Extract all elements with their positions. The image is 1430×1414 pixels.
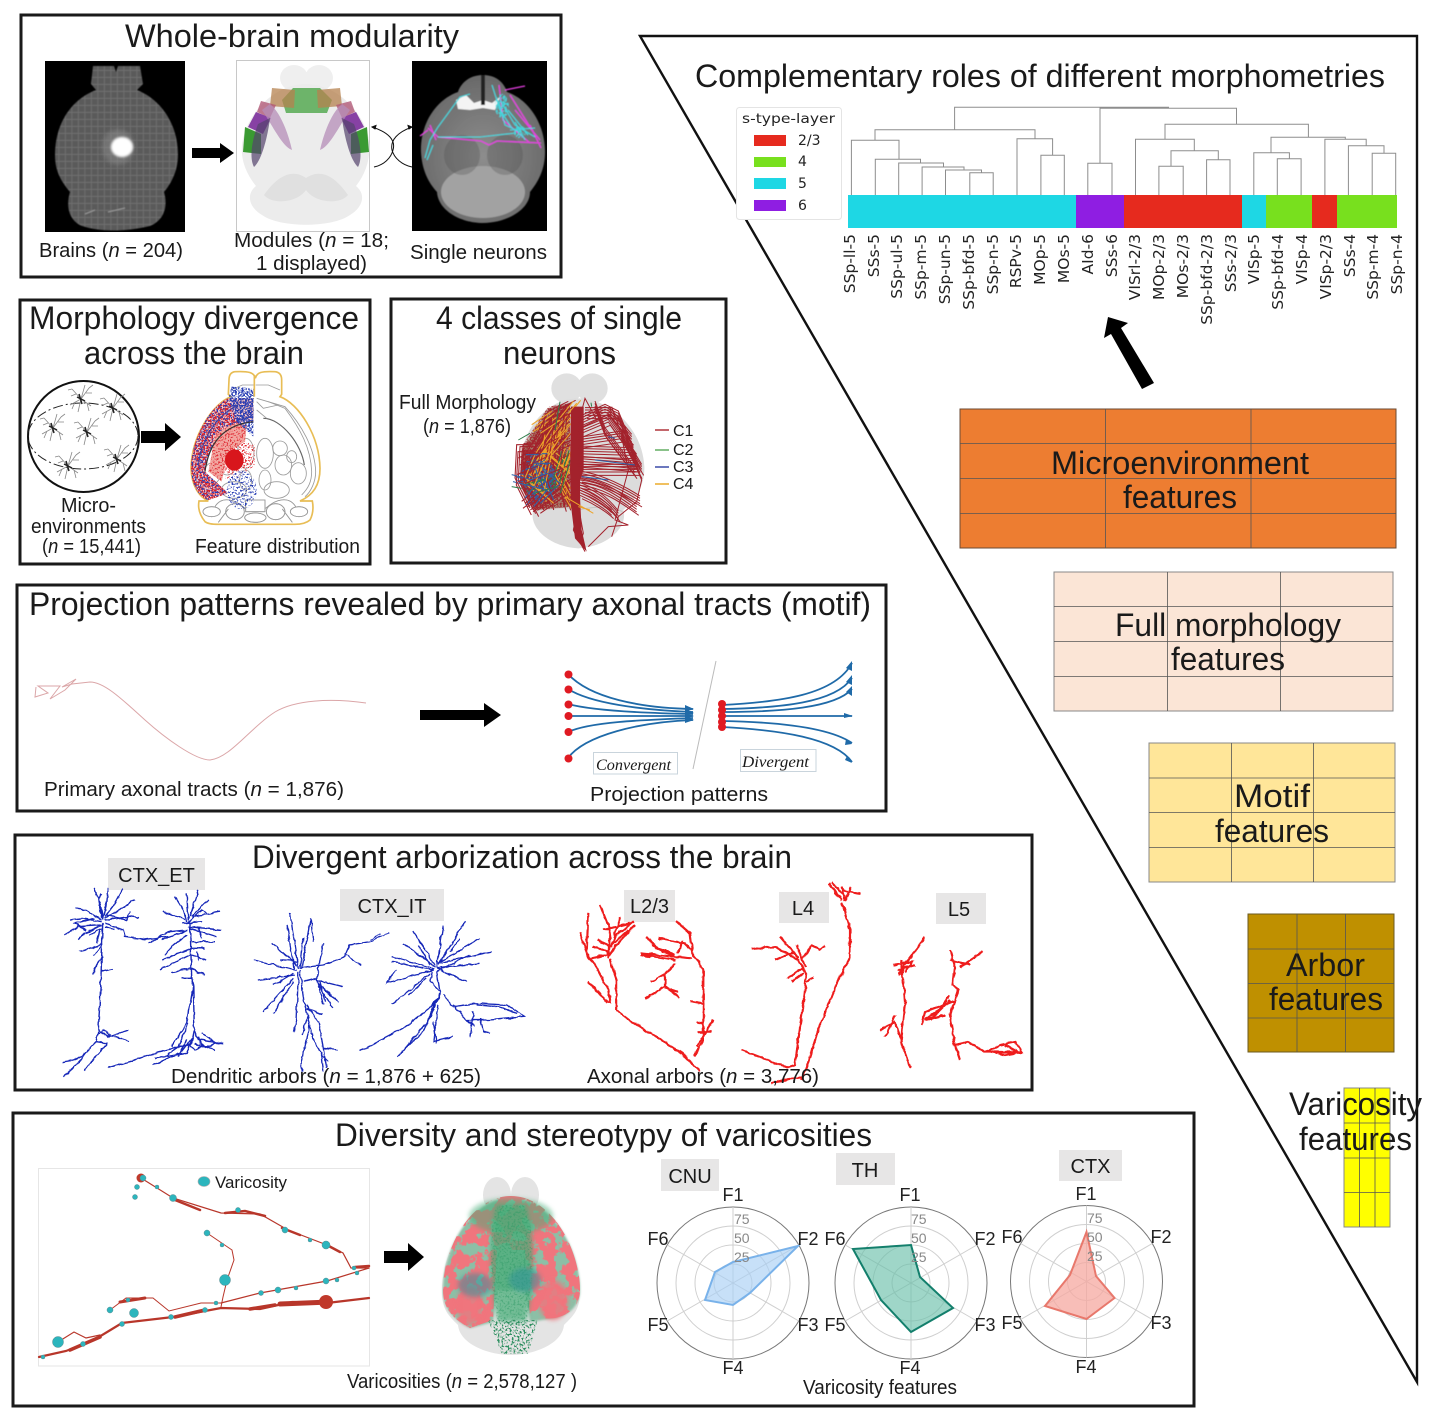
label: microenvironments: environments	[31, 516, 146, 538]
legend: s-type-layer: 2/3	[798, 133, 821, 149]
label: varicosity features: Varicosity features	[803, 1377, 957, 1399]
radar: TH: F1	[899, 1185, 921, 1205]
radar: CTX: F5	[1001, 1313, 1023, 1333]
diagram: divergent: Divergent	[741, 754, 810, 771]
heatmap labels: MOs-2/3	[1174, 234, 1192, 298]
radar: CTX: 25	[1087, 1248, 1103, 1264]
title: 4 classes: neurons	[503, 335, 616, 371]
heatmap labels: SSp-ll-5	[841, 234, 859, 293]
block: varicosity features	[1289, 1086, 1422, 1227]
radar: TH: F2	[974, 1229, 996, 1249]
label: microenvironments	[31, 495, 146, 558]
legend: C1-C4: C2	[673, 442, 694, 459]
dendritic neurons	[62, 888, 525, 1077]
title: morphology divergence: across the brain	[84, 335, 304, 371]
legend: varicosity: Varicosity	[215, 1174, 288, 1192]
image: neuron classes on brain	[512, 373, 644, 552]
radar: TH: F6	[824, 1229, 846, 1249]
heatmap: layer strip	[848, 195, 1397, 228]
heatmap labels: MOp-2/3	[1150, 234, 1168, 300]
radar: TH: 50	[911, 1230, 927, 1246]
heatmap labels: SSs-5	[865, 234, 883, 277]
title: 4 classes	[436, 300, 682, 371]
image: primary axonal tract	[35, 679, 366, 760]
radar: CNU: 75	[734, 1211, 750, 1227]
heatmap labels: SSp-n-4	[1388, 234, 1406, 294]
panel: 4 classes of single neurons	[391, 299, 726, 563]
image: feature distribution atlas	[191, 372, 320, 524]
block: motif features	[1149, 743, 1395, 882]
block: full morphology features	[1054, 572, 1393, 711]
panel: projection patterns	[17, 585, 886, 811]
tag: CTX_IT	[340, 889, 444, 921]
divider	[693, 661, 716, 769]
heatmap labels: VISrl-2/3	[1126, 234, 1144, 300]
heatmap labels: VISp-2/3	[1317, 234, 1335, 299]
legend: C1-C4	[655, 423, 694, 493]
label: microenvironments: (n = 15,441)	[42, 536, 141, 558]
label: primary axonal tracts: Primary axonal tracts ( n = 1,876)	[44, 779, 344, 801]
neurons: L5	[880, 937, 1022, 1068]
heatmap labels: RSPv-5	[1007, 234, 1025, 288]
panel: whole-brain modularity	[21, 15, 561, 277]
axonal neurons	[580, 883, 1022, 1083]
radar: CNU: F6	[647, 1229, 669, 1249]
image: modules on brain	[236, 60, 370, 232]
label: full morphology: (n = 1,876)	[423, 416, 511, 438]
radar: CTX: F2	[1150, 1227, 1172, 1247]
block: arbor features: features	[1269, 981, 1383, 1017]
radar: CTX: F3	[1150, 1313, 1172, 1333]
label: brains: Brains (n = 204)	[39, 240, 183, 262]
legend: s-type-layer: 6	[798, 198, 807, 214]
neurons: CTX_IT	[253, 913, 525, 1072]
label: full morphology	[399, 392, 536, 438]
radar: CNU: F4	[722, 1358, 744, 1378]
diagram: convergent: Convergent	[596, 757, 672, 774]
heatmap labels: SSp-m-4	[1364, 234, 1382, 300]
heatmap labels: SSp-un-5	[936, 234, 954, 304]
tag: L4: L4	[792, 898, 814, 920]
title: divergent arborization: Divergent arborization across the brain	[252, 839, 792, 875]
diagram: convergent	[564, 670, 694, 774]
legend: C1-C4: C1	[673, 423, 694, 440]
label: full morphology: Full Morphology	[399, 392, 536, 414]
label: varicosities: Varicosities (n = 2,578,127 )	[347, 1371, 577, 1393]
label: microenvironments: Micro-	[61, 495, 116, 517]
tag: CTX_ET: CTX_ET	[118, 865, 195, 887]
heatmap labels: VISp-4	[1293, 234, 1311, 284]
diagram: microenvironment circle	[28, 381, 139, 492]
block: varicosity features: Varicosity	[1289, 1086, 1422, 1122]
diagram: divergent	[718, 661, 853, 772]
heatmap labels: VISp-5	[1245, 234, 1263, 284]
block: motif features: Motif	[1234, 778, 1310, 814]
label: axonal arbors: Axonal arbors (n = 3,776)	[587, 1066, 819, 1088]
label: dendritic arbors: Dendritic arbors ( n = 1,876 + 625)	[171, 1066, 481, 1088]
panel: morphology divergence	[20, 300, 370, 564]
block: full morphology features: features	[1171, 641, 1285, 677]
title: whole-brain modularity: Whole-brain modularity	[125, 18, 459, 54]
title: complementary roles: Complementary roles of different morphometries	[695, 58, 1385, 94]
heatmap labels: SSp-bfd-5	[960, 234, 978, 310]
heatmap labels: AId-6	[1079, 234, 1097, 274]
block: arbor features	[1248, 914, 1394, 1052]
radar: CNU	[647, 1159, 819, 1378]
radar: CNU: CNU	[668, 1166, 712, 1188]
neurons: L2/3 and L4	[580, 883, 860, 1083]
tag: L2/3: L2/3	[630, 896, 669, 918]
heatmap labels: SSp-ul-5	[888, 234, 906, 299]
image: axon with varicosities	[38, 1168, 370, 1366]
radar: CTX: CTX	[1070, 1156, 1110, 1178]
heatmap labels	[841, 234, 1406, 325]
tag: CTX_ET	[108, 858, 205, 890]
radar: CNU: F1	[722, 1185, 744, 1205]
arrow: axon to brain	[384, 1243, 424, 1271]
radar: CNU: 50	[734, 1230, 750, 1246]
heatmap labels: SSs-4	[1341, 234, 1359, 277]
block: arbor features: Arbor	[1286, 947, 1365, 983]
heatmap labels: SSs-2/3	[1222, 234, 1240, 292]
block: microenvironment features	[960, 409, 1396, 548]
image: varicosities on brain	[442, 1177, 580, 1355]
block: motif features: features	[1215, 813, 1329, 849]
heatmap labels: SSp-bfd-2/3	[1198, 234, 1216, 325]
tag: L5: L5	[948, 899, 970, 921]
title: morphology divergence	[29, 300, 359, 371]
radar: CTX: F6	[1001, 1227, 1023, 1247]
title: morphology divergence: Morphology divergence	[29, 300, 359, 336]
heatmap labels: SSp-m-5	[912, 234, 930, 300]
title: 4 classes: 4 classes of single	[436, 300, 682, 336]
legend: s-type-layer: 5	[798, 176, 807, 192]
label: modules: 1 displayed)	[256, 253, 367, 275]
radar: CNU: F3	[797, 1315, 819, 1335]
legend: s-type-layer: 4	[798, 154, 807, 170]
heatmap labels: SSp-bfd-4	[1269, 234, 1287, 310]
legend: C1-C4: C3	[673, 459, 694, 476]
radar: CTX: F1	[1075, 1184, 1097, 1204]
arrows: bidirectional curved	[372, 126, 412, 167]
label: feature distribution: Feature distribution	[195, 536, 360, 558]
radar: TH: 75	[911, 1211, 927, 1227]
arrow: to heatmap	[1104, 317, 1154, 389]
radar: TH: F4	[899, 1358, 921, 1378]
panel: varicosities	[13, 1113, 1194, 1406]
image: single neurons on template	[412, 61, 547, 231]
radar: TH: F5	[824, 1315, 846, 1335]
dendrogram	[851, 107, 1396, 195]
legend: C1-C4: C4	[673, 476, 694, 493]
radar: CTX	[1001, 1150, 1172, 1377]
tag: L5	[936, 893, 986, 924]
block: full morphology features: Full morphology	[1115, 607, 1341, 643]
label: modules	[234, 230, 389, 275]
label: single neurons: Single neurons	[410, 242, 547, 264]
title: varicosities: Diversity and stereotypy of varicosities	[335, 1117, 872, 1153]
radar: TH	[824, 1153, 996, 1378]
arrow: tracts to patterns	[420, 703, 501, 727]
heatmap labels: MOs-5	[1055, 234, 1073, 283]
title: projection patterns: Projection patterns revealed by primary axonal tracts (motif)	[29, 586, 871, 622]
block: varicosity features: features	[1299, 1121, 1412, 1157]
arrow: brains to modules	[192, 143, 234, 163]
label: modules: Modules (n = 18;	[234, 230, 389, 252]
radar: CTX: 50	[1087, 1229, 1103, 1245]
tag: L2/3	[624, 890, 675, 922]
radar: TH: F3	[974, 1315, 996, 1335]
panel: divergent arborization	[15, 835, 1032, 1090]
block: microenvironment features: features	[1123, 479, 1237, 515]
radar: TH: TH	[852, 1160, 878, 1182]
image: light-sheet brain	[45, 61, 185, 232]
heatmap labels: SSs-6	[1103, 234, 1121, 277]
legend: s-type-layer: s-type-layer	[742, 111, 836, 127]
radar: CNU: 25	[734, 1249, 750, 1265]
radar: TH: 25	[911, 1249, 927, 1265]
block: microenvironment features: Microenvironment	[1051, 445, 1309, 481]
radar: CTX: F4	[1075, 1357, 1097, 1377]
label: projection patterns: Projection patterns	[590, 784, 768, 806]
arrow: microenvironments to distribution	[141, 423, 181, 451]
neurons: CTX_ET	[62, 888, 223, 1077]
triangle: complementary roles	[640, 36, 1422, 1382]
radar: CNU: F2	[797, 1229, 819, 1249]
tag: L4	[779, 892, 829, 923]
legend: s-type-layer	[736, 108, 842, 220]
radar: CTX: 75	[1087, 1210, 1103, 1226]
heatmap labels: MOp-5	[1031, 234, 1049, 285]
heatmap labels: SSp-n-5	[984, 234, 1002, 294]
radar: CNU: F5	[647, 1315, 669, 1335]
tag: CTX_IT: CTX_IT	[358, 896, 426, 918]
